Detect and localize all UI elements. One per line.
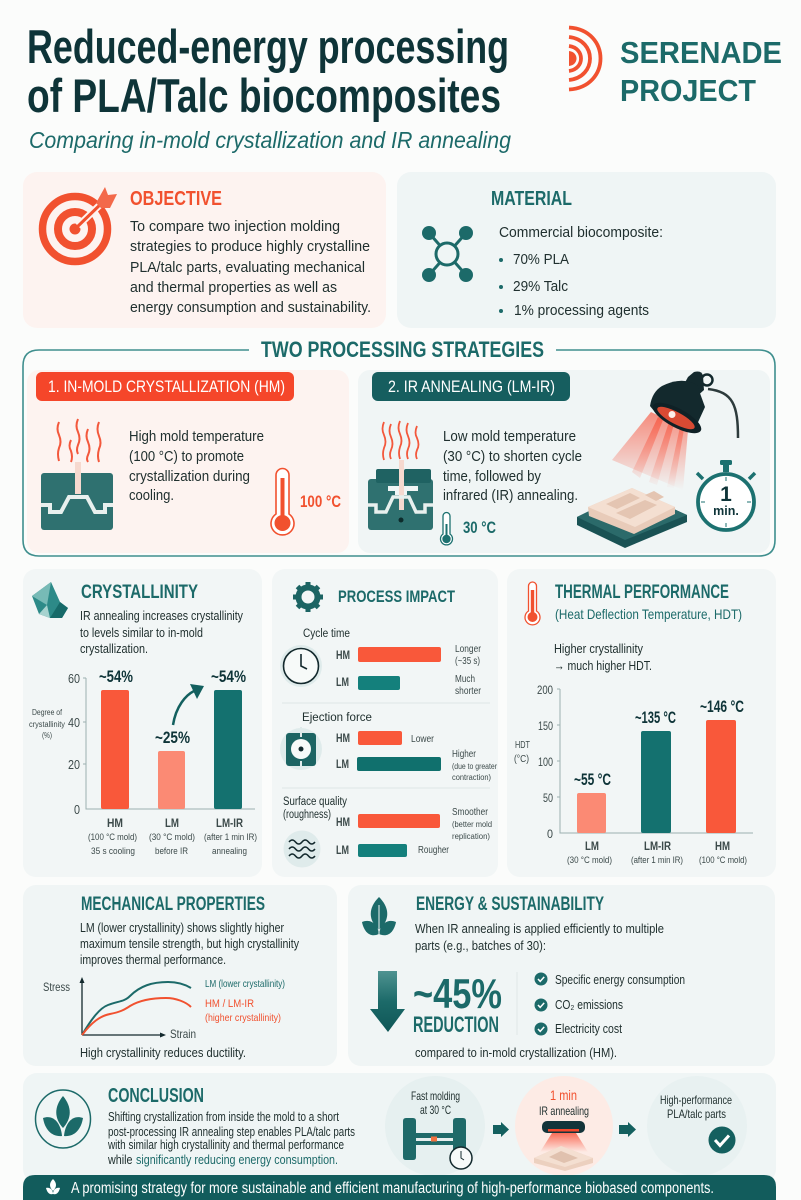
mechanical text: maximum tensile strength, but high crystallinity xyxy=(80,936,299,951)
mechanical text xyxy=(80,920,299,967)
thermal heading xyxy=(555,582,742,622)
icon: molded tray on plate xyxy=(577,488,687,548)
step: high-performance parts xyxy=(647,1076,747,1176)
strategy 2 text: Low mold temperature xyxy=(443,429,576,445)
objective text: and thermal properties as well as xyxy=(130,279,337,296)
material heading: MATERIAL xyxy=(491,188,572,210)
energy heading: ENERGY & SUSTAINABILITY xyxy=(416,894,604,915)
bar: LM xyxy=(158,751,185,809)
panel: two processing strategies xyxy=(23,337,775,556)
icon: molecule xyxy=(422,226,473,282)
arrow: LM to LM-IR xyxy=(173,684,204,725)
step: IR annealing: IR annealing xyxy=(539,1104,589,1118)
panel: crystallinity xyxy=(23,569,262,877)
arrow: annealing to parts xyxy=(619,1122,636,1137)
bar chart: degree of crystallinity: (%) xyxy=(42,731,52,740)
mechanical text: improves thermal performance. xyxy=(80,952,226,967)
chart: stress-strain curves: Strain xyxy=(170,1027,196,1041)
title: Reduced-energy processing xyxy=(27,20,509,73)
icon: thermometer 100 °C xyxy=(271,469,294,535)
metric: cycle time: shorter xyxy=(455,686,482,697)
icon: tray xyxy=(534,1146,593,1171)
metric: cycle time: (~35 s) xyxy=(455,656,480,667)
strategy 2 text: (30 °C) to shorten cycle xyxy=(443,449,582,465)
crystallinity text: to levels similar to in-mold xyxy=(80,625,203,640)
bar chart: degree of crystallinity: (after 1 min IR) xyxy=(204,832,257,842)
bar chart: degree of crystallinity xyxy=(29,667,257,856)
bar chart: degree of crystallinity: LM-IR xyxy=(216,816,243,830)
bar chart: HDT: LM xyxy=(585,841,599,853)
metric: cycle time: LM xyxy=(336,675,349,689)
panel: process impact xyxy=(272,569,498,877)
metric: cycle time xyxy=(280,628,482,697)
icon: IR lamp xyxy=(612,372,738,490)
panel: mechanical properties xyxy=(23,885,337,1066)
metric: surface quality: HM xyxy=(336,815,350,829)
bar chart: HDT: HDT xyxy=(515,739,530,751)
bar chart: degree of crystallinity: annealing xyxy=(212,846,247,856)
logo wordmark xyxy=(620,35,782,108)
metric: ejection force: Lower xyxy=(411,734,435,745)
conclusion text: Shifting crystallization from inside the mold to a short xyxy=(108,1110,339,1124)
strategy 2 label: 2. IR ANNEALING (LM-IR) xyxy=(388,377,555,396)
bar chart: degree of crystallinity: 35 s cooling xyxy=(91,846,135,856)
bar: LM-IR xyxy=(214,690,242,809)
icon: gear xyxy=(293,582,323,612)
bar chart: HDT: HM xyxy=(715,841,730,853)
process impact heading: PROCESS IMPACT xyxy=(338,587,455,606)
bar: LM xyxy=(577,793,606,833)
material list: 70% PLA xyxy=(513,252,569,268)
step: fast molding: Fast molding xyxy=(411,1089,460,1103)
chart: stress-strain curves: LM (lower crystallinity) xyxy=(205,978,285,990)
bar chart: HDT: 50 xyxy=(543,791,553,805)
bar chart: degree of crystallinity: HM xyxy=(107,816,123,830)
logo wordmark: SERENADE xyxy=(620,35,782,70)
stat: 45 percent reduction: REDUCTION xyxy=(413,1012,499,1037)
bar chart: degree of crystallinity: LM xyxy=(165,816,179,830)
conclusion text: significantly reducing energy consumption. xyxy=(136,1153,338,1167)
metric: surface quality: (better mold xyxy=(452,820,492,829)
bar chart: degree of crystallinity: (100 °C mold) xyxy=(88,832,137,842)
material list: 29% Talc xyxy=(513,279,568,295)
metric: ejection force: contraction) xyxy=(452,773,491,782)
strategy 2 text: time, followed by xyxy=(443,469,542,485)
bar chart: HDT: ~146 °C xyxy=(700,697,744,716)
bar: HM xyxy=(101,690,129,809)
metric: ejection force: (due to greater xyxy=(452,762,497,771)
label: 30 °C: 30 °C xyxy=(463,518,496,537)
panel: thermal performance xyxy=(507,569,776,877)
conclusion heading: CONCLUSION xyxy=(108,1085,204,1107)
strategy 1 text: crystallization during xyxy=(129,469,250,485)
checklist xyxy=(534,972,685,1036)
icon: check xyxy=(708,1126,736,1154)
thermal text: → much higher HDT. xyxy=(554,658,652,673)
conclusion text: with similar high crystallinity and thermal performance xyxy=(107,1138,344,1152)
objective text: PLA/talc parts, evaluating mechanical xyxy=(130,259,365,276)
bar chart: HDT: (after 1 min IR) xyxy=(631,855,683,865)
icon: mold xyxy=(403,1118,466,1160)
label: 100 °C: 100 °C xyxy=(300,492,341,511)
arrow: down reduction xyxy=(370,971,405,1032)
bar chart: HDT: (30 °C mold) xyxy=(567,855,612,865)
step: fast molding: at 30 °C xyxy=(420,1103,451,1117)
icon: ejection mold xyxy=(280,727,322,770)
metric: surface quality: Rougher xyxy=(418,845,450,856)
icon: crystal xyxy=(32,582,68,618)
material list: Commercial biocomposite: xyxy=(499,225,663,241)
banner: takeaway xyxy=(23,1175,776,1200)
bar chart: degree of crystallinity: ~25% xyxy=(155,728,190,747)
metric: ejection force: LM xyxy=(336,757,349,771)
strategies heading: TWO PROCESSING STRATEGIES xyxy=(261,337,544,362)
metric: surface quality: Smoother xyxy=(452,807,489,818)
icon: heat waves xyxy=(382,421,418,460)
icon: sprout xyxy=(46,1179,60,1194)
material list xyxy=(499,225,663,319)
chart: stress-strain curves: (higher crystallinity) xyxy=(205,1012,281,1024)
icon: heat waves xyxy=(58,419,100,462)
strategy 2 label xyxy=(372,372,570,401)
metric: ejection force xyxy=(280,712,497,782)
metric: surface quality xyxy=(283,796,492,868)
icon: rough surface xyxy=(284,830,320,868)
bar chart: degree of crystallinity: 0 xyxy=(74,802,80,817)
panel: conclusion xyxy=(23,1073,776,1183)
thermal heading: (Heat Deflection Temperature, HDT) xyxy=(555,606,742,622)
bar chart: HDT: 0 xyxy=(547,827,553,841)
strategy 2 text: infrared (IR) annealing. xyxy=(443,488,578,504)
bar chart: degree of crystallinity: (30 °C mold) xyxy=(149,832,195,842)
bar chart: degree of crystallinity: Degree of xyxy=(32,708,63,717)
icon: lamp bar xyxy=(540,1121,588,1152)
step: IR annealing: 1 min xyxy=(550,1087,577,1103)
bar chart: HDT: LM-IR xyxy=(644,841,672,853)
metric: ejection force: Ejection force xyxy=(302,712,372,724)
crystallinity heading: CRYSTALLINITY xyxy=(81,582,198,603)
bar chart: HDT: ~135 °C xyxy=(635,708,676,727)
step: IR annealing xyxy=(515,1076,613,1176)
bar chart: degree of crystallinity: crystallinity xyxy=(29,720,65,729)
checklist: Electricity cost xyxy=(555,1021,622,1036)
icon: 1 minute stopwatch xyxy=(697,460,755,530)
bar chart: degree of crystallinity: 20 xyxy=(68,757,80,772)
comparison note: compared to in-mold crystallization (HM). xyxy=(415,1045,617,1060)
bar chart: HDT: 200 xyxy=(537,683,553,697)
icon: 1 minute stopwatch: 1 xyxy=(720,483,732,506)
icon: leaves xyxy=(362,897,396,937)
bar chart: degree of crystallinity: ~54% xyxy=(211,667,246,686)
panel: objective xyxy=(23,172,386,328)
thermal heading: THERMAL PERFORMANCE xyxy=(555,582,729,603)
icon: clock xyxy=(280,645,322,687)
energy text xyxy=(415,921,664,953)
arrow: molding to annealing xyxy=(493,1122,509,1137)
crystallinity text: crystallization. xyxy=(80,641,148,656)
bar chart: HDT: ~55 °C xyxy=(574,770,611,789)
metric: surface quality: Surface quality xyxy=(283,796,347,808)
icon: thermometer 30 °C xyxy=(440,512,452,545)
metric: cycle time: Longer xyxy=(455,644,482,655)
objective heading: OBJECTIVE xyxy=(130,188,222,210)
energy text: When IR annealing is applied efficiently to multiple xyxy=(415,921,664,936)
mechanical text: LM (lower crystallinity) shows slightly higher xyxy=(80,920,285,935)
bar chart: degree of crystallinity: before IR xyxy=(155,846,188,856)
conclusion text xyxy=(107,1110,355,1167)
conclusion text: while xyxy=(107,1153,133,1167)
strategy 1 label: 1. IN-MOLD CRYSTALLIZATION (HM) xyxy=(48,377,285,396)
chart: stress-strain curves xyxy=(43,977,285,1041)
conclusion text: post-processing IR annealing step enables PLA/talc parts xyxy=(108,1125,355,1139)
icon: 1 minute stopwatch: min. xyxy=(713,504,739,518)
thermal text: Higher crystallinity xyxy=(554,641,643,656)
bar chart: HDT: (°C) xyxy=(514,753,529,765)
metric: ejection force: Higher xyxy=(452,749,477,760)
icon: leaf badge xyxy=(36,1090,90,1148)
stat: 45 percent reduction: ~45% xyxy=(413,970,502,1017)
title xyxy=(27,20,509,122)
strategy 1 text: cooling. xyxy=(129,488,174,504)
strategy 1 text xyxy=(129,429,264,504)
energy text: parts (e.g., batches of 30): xyxy=(415,938,546,953)
step: high-performance parts: High-performance xyxy=(660,1093,732,1107)
step: high-performance parts: PLA/talc parts xyxy=(667,1107,726,1121)
icon: thermometer xyxy=(525,582,540,625)
bar chart: degree of crystallinity: 40 xyxy=(68,715,80,730)
objective text: To compare two injection molding xyxy=(130,218,340,235)
panel: in-mold crystallization xyxy=(27,370,349,553)
objective text: strategies to produce highly crystalline xyxy=(130,238,370,255)
metric: ejection force: HM xyxy=(336,731,350,745)
chart: stress-strain curves: Stress xyxy=(43,980,70,994)
panel: IR annealing xyxy=(358,370,770,553)
material list: 1% processing agents xyxy=(514,303,649,319)
crystallinity text: IR annealing increases crystallinity xyxy=(80,608,243,623)
metric: surface quality: (roughness) xyxy=(283,809,331,821)
checklist: CO₂ emissions xyxy=(555,997,623,1012)
bar: HM xyxy=(706,720,736,833)
bar chart: HDT: 150 xyxy=(538,719,553,733)
title: of PLA/Talc biocomposites xyxy=(27,69,501,122)
bar chart: HDT: (100 °C mold) xyxy=(699,855,747,865)
strategy 2 text xyxy=(443,429,582,504)
bar chart: degree of crystallinity: 60 xyxy=(68,671,80,686)
icon: hot mold xyxy=(41,462,113,530)
subtitle: Comparing in-mold crystallization and IR annealing xyxy=(29,127,511,153)
metric: cycle time: Cycle time xyxy=(303,628,350,640)
bar: LM-IR xyxy=(641,731,671,833)
bar chart: HDT: 100 xyxy=(538,755,553,769)
objective text xyxy=(130,218,371,316)
panel: material xyxy=(397,172,776,328)
strategy 1 text: (100 °C) to promote xyxy=(129,449,244,465)
ductility note: High crystallinity reduces ductility. xyxy=(80,1045,246,1060)
checklist: Specific energy consumption xyxy=(555,972,685,987)
thermal text xyxy=(554,641,652,673)
icon: cold mold xyxy=(368,460,433,530)
icon: signal arcs xyxy=(569,28,600,90)
stat: 45 percent reduction xyxy=(413,970,502,1037)
logo wordmark: PROJECT xyxy=(620,73,756,108)
crystallinity text xyxy=(80,608,243,656)
metric: cycle time: Much xyxy=(455,674,475,685)
icon: clock xyxy=(450,1147,472,1169)
metric: surface quality: replication) xyxy=(452,832,490,841)
step: fast molding xyxy=(385,1076,485,1176)
objective text: energy consumption and sustainability. xyxy=(130,299,371,316)
metric: cycle time: HM xyxy=(336,648,350,662)
strategy 1 label xyxy=(36,372,294,401)
strategy 1 text: High mold temperature xyxy=(129,429,264,445)
logo: Serenade Project xyxy=(569,28,782,108)
chart: stress-strain curves: HM / LM-IR xyxy=(205,998,254,1010)
bar chart: degree of crystallinity: ~54% xyxy=(99,667,133,686)
mechanical heading: MECHANICAL PROPERTIES xyxy=(81,894,265,915)
metric: surface quality: LM xyxy=(336,843,349,857)
panel: energy and sustainability xyxy=(348,885,775,1066)
icon: target xyxy=(42,187,117,262)
bar chart: HDT xyxy=(514,683,753,865)
